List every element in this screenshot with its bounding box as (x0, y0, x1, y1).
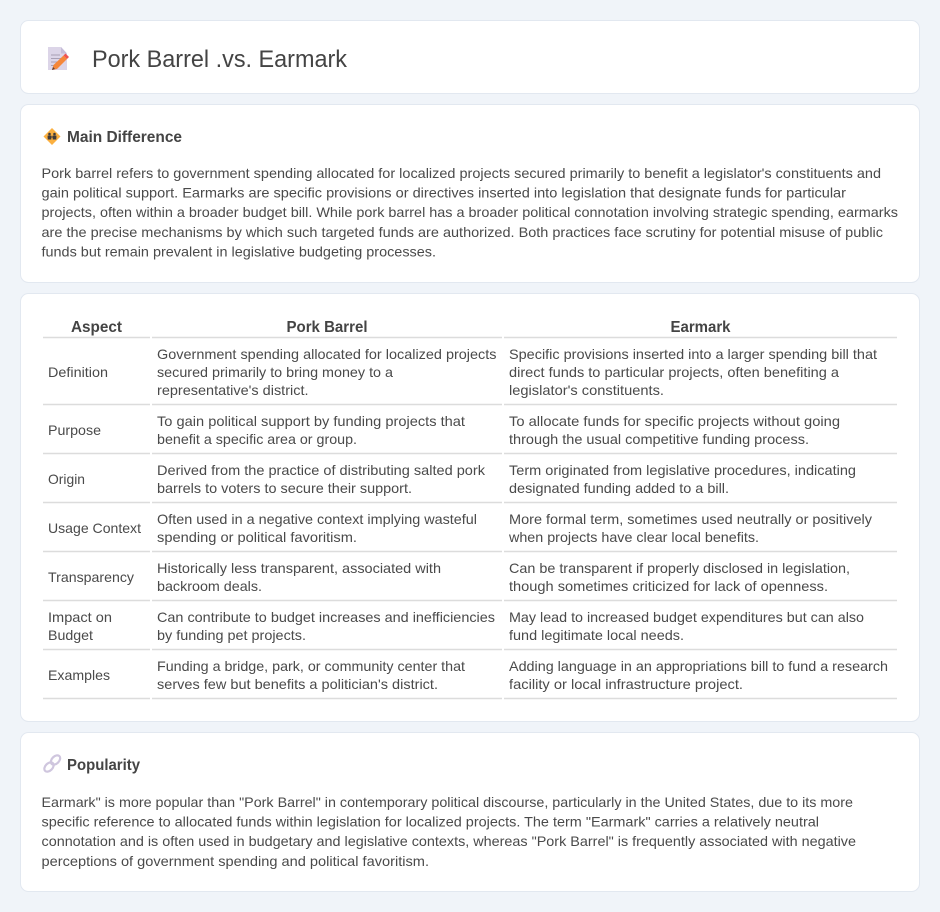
table row: usage context: Usage Context (48, 520, 141, 536)
table row: purpose: To gain political support by funding projects that (157, 413, 465, 429)
icon: chain link (43, 754, 62, 773)
table header row: Aspect (71, 319, 123, 336)
panel: comparison table (20, 294, 920, 722)
text block: popularity paragraph (42, 794, 856, 869)
table row: purpose: benefit a specific area or group. (157, 431, 357, 447)
icon: document with pencil (48, 47, 69, 70)
text block: main difference paragraph (42, 165, 898, 259)
table row: transparency: Historically less transparent, associated with (157, 560, 441, 576)
table row: examples: serves few but benefits a politician's district. (157, 676, 438, 692)
table row: impact on budget: Can contribute to budget increases and inefficiencies (157, 609, 495, 625)
table row: usage context: when projects have clear local benefits. (508, 529, 759, 545)
table row: purpose: Purpose (48, 422, 101, 438)
table row: usage context: More formal term, sometimes used neutrally or positively (509, 511, 872, 527)
table row: origin: Derived from the practice of distributing salted pork (157, 462, 486, 478)
table row: impact on budget: Budget (48, 627, 93, 643)
table row: examples: Funding a bridge, park, or community center that (157, 658, 465, 674)
heading: main difference: Main Difference (67, 129, 182, 146)
text block: popularity paragraph: Earmark" is more popular than "Pork Barrel" in contemporary political discourse, particularly in the United States, due to its more (42, 794, 853, 810)
panel: title header (20, 20, 920, 94)
table header row: Earmark (670, 319, 731, 336)
table row: usage context: spending or political favoritism. (157, 529, 357, 545)
table row: origin: Origin (48, 471, 85, 487)
table row: examples: facility or local infrastructure project. (509, 676, 743, 692)
table row: transparency: backroom deals. (157, 578, 262, 594)
table row: transparency: Can be transparent if properly disclosed in legislation, (509, 560, 850, 576)
text block: main difference paragraph: projects, often within a broader budget bill. While pork barrel has a broader political connotation involving strategic spending, earmarks (42, 204, 898, 220)
table row: impact on budget (43, 609, 897, 650)
table row: usage context: Often used in a negative context implying wasteful (157, 511, 477, 527)
text block: main difference paragraph: Pork barrel refers to government spending allocated for localized projects secured primarily to benefit a legislator's constituents and (42, 165, 881, 181)
table row: definition: direct funds to particular projects, often benefiting a (509, 364, 839, 380)
table row: transparency (43, 560, 897, 600)
text block: popularity paragraph: perceptions of government spending and political favoritism. (42, 853, 429, 869)
table row: definition: Definition (48, 364, 108, 380)
table row: impact on budget: by funding pet projects. (157, 627, 306, 643)
table row: definition: Government spending allocated for localized projects (157, 346, 496, 362)
table row: impact on budget: fund legitimate local needs. (509, 627, 684, 643)
table row: transparency: Transparency (48, 569, 134, 585)
panel: popularity (20, 732, 920, 892)
table row: transparency: though sometimes criticized for lack of openness. (509, 578, 828, 594)
table row: examples (43, 658, 897, 698)
text block: popularity paragraph: connotation and is often used in budgetary and legislative contexts, whereas "Pork Barrel" is frequently associated with negative (42, 833, 856, 849)
table row: definition (43, 346, 897, 404)
table row: origin: Term originated from legislative procedures, indicating (509, 462, 856, 478)
table row: definition: secured primarily to bring money to a (157, 364, 393, 380)
table row: purpose: To allocate funds for specific projects without going (509, 413, 840, 429)
table row: origin (43, 462, 897, 502)
heading: popularity: Popularity (67, 757, 140, 774)
text block: popularity paragraph: specific reference to allocated funds within legislation for localized projects. The term "Earmark" carries a relatively neutral (42, 814, 819, 830)
table row: impact on budget: Impact on (48, 609, 112, 625)
table row: origin: barrels to voters to secure their support. (157, 480, 412, 496)
text block: main difference paragraph: gain political support. Earmarks are specific provisions or directives inserted into legislation that designate funds for particular (42, 185, 846, 201)
text block: main difference paragraph: funds but remain prevalent in legislative budgeting processes. (42, 243, 436, 259)
table header row: Pork Barrel (286, 319, 368, 336)
table row: definition: legislator's constituents. (509, 382, 664, 398)
table row: definition: representative's district. (157, 382, 308, 398)
table row: examples: Examples (48, 667, 110, 683)
table header row (43, 319, 897, 338)
table row: purpose: through the usual competitive funding process. (509, 431, 809, 447)
table row: definition: Specific provisions inserted into a larger spending bill that (509, 346, 877, 362)
panel: main difference (20, 104, 920, 282)
table row: usage context (43, 511, 897, 552)
table row: purpose (43, 413, 897, 454)
title: Pork Barrel .vs. Earmark (92, 46, 348, 73)
text block: main difference paragraph: are the precise mechanisms by which such targeted funds are authorized. Both practices face scrutiny for potential misuse of public (42, 224, 883, 240)
icon: warning diamond (44, 128, 60, 145)
table row: origin: designated funding added to a bill. (509, 480, 729, 496)
table row: examples: Adding language in an appropriations bill to fund a research (509, 658, 888, 674)
table row: impact on budget: May lead to increased budget expenditures but can also (509, 609, 864, 625)
